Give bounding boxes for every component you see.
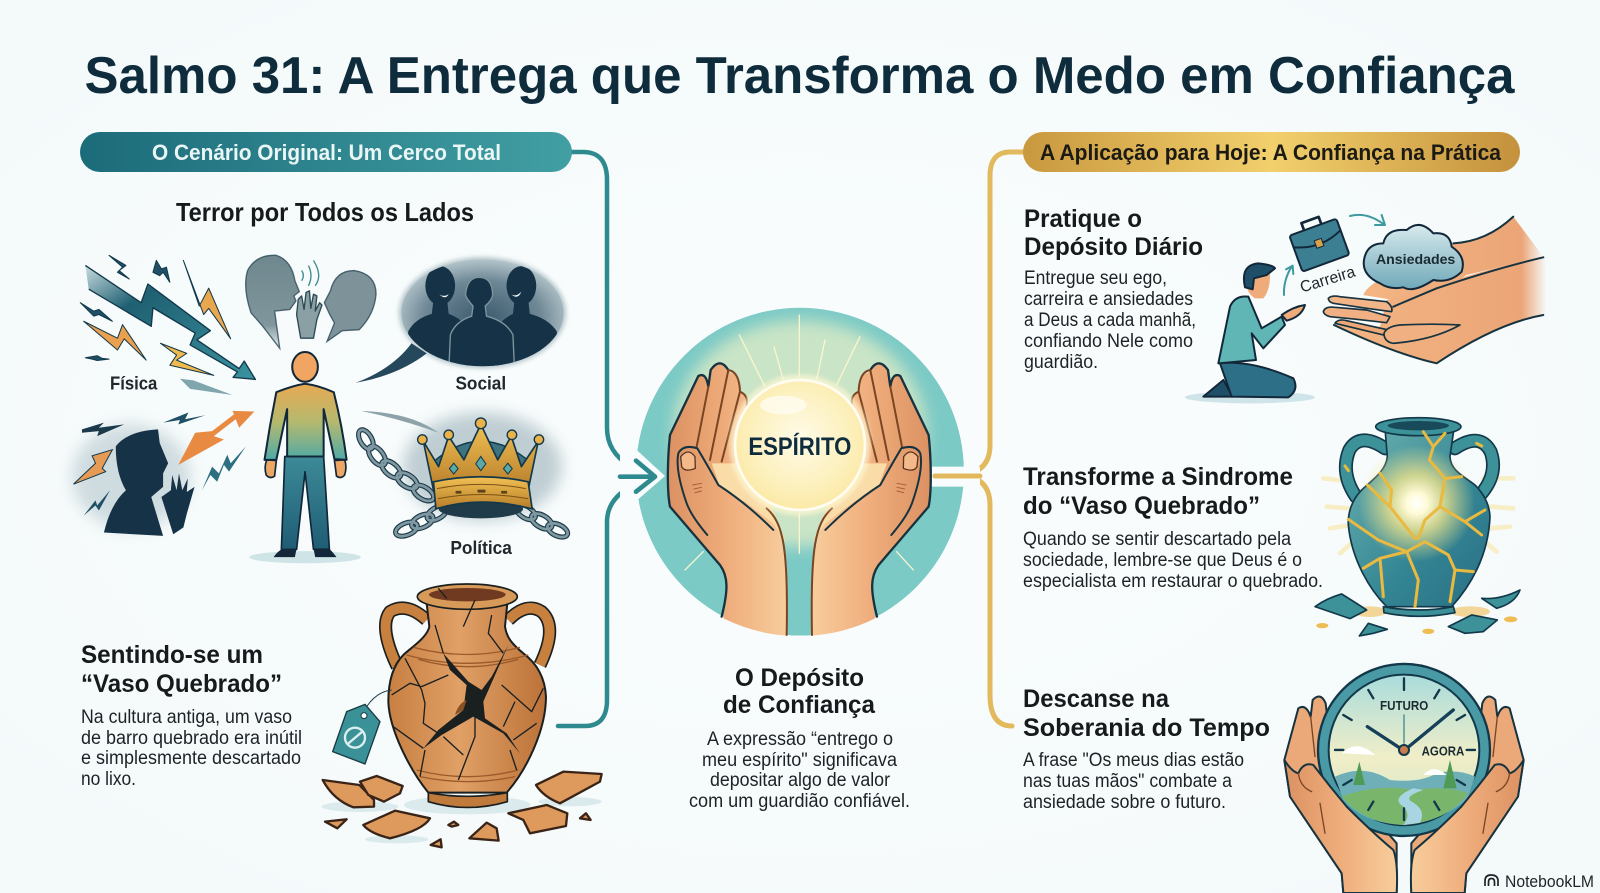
text block: transform the broken vase syndrome: Quando se sentir descartado pela — [1023, 529, 1291, 550]
text block: broken vase: Na cultura antiga, um vaso — [81, 707, 292, 728]
text block: broken vase: Sentindo-se um — [81, 641, 263, 669]
tag: discarded — [333, 690, 392, 764]
illustration: person handing over burdens — [1185, 211, 1547, 403]
label: social: Social — [455, 373, 506, 394]
text block: daily deposit: Depósito Diário — [1024, 233, 1203, 261]
text block: deposit of trust: O Depósito — [735, 664, 864, 692]
light rays — [685, 315, 913, 570]
illustration: broken clay vase — [322, 584, 602, 847]
right connector lines — [934, 152, 1023, 726]
text block: transform the broken vase syndrome: sociedade, lembre-se que Deus é o — [1023, 550, 1302, 571]
label: política: Política — [450, 537, 513, 558]
text block: transform the broken vase syndrome: Transforme a Sindrome — [1023, 463, 1293, 491]
text block: daily deposit: carreira e ansiedades — [1024, 289, 1193, 310]
label: career: Carreira — [1298, 264, 1357, 296]
notches in circle — [620, 450, 980, 501]
text block: rest in sovereignty of time: A frase "Os meus dias estão — [1023, 750, 1244, 771]
text block: rest in sovereignty of time: Descanse na — [1023, 685, 1170, 713]
icon: broken teal shards — [1315, 590, 1520, 636]
icon: kneeling person — [1185, 263, 1315, 403]
central illustration: hands holding spirit — [620, 308, 980, 636]
text block: deposit of trust: A expressão “entrego o — [707, 729, 893, 750]
gold connector stub — [935, 468, 980, 483]
text block: daily deposit: a Deus a cada manhã, — [1024, 310, 1196, 331]
text block: rest in sovereignty of time: ansiedade sobre o futuro. — [1023, 792, 1226, 813]
icon: crown and chains — [356, 411, 570, 540]
clock label: future: FUTURO — [1380, 699, 1428, 713]
text block: rest in sovereignty of time: nas tuas mãos" combate a — [1023, 771, 1232, 792]
vase body — [388, 603, 546, 793]
circular background — [636, 308, 964, 636]
text block: daily deposit: Pratique o — [1024, 205, 1142, 233]
illustration: person surrounded by terror — [72, 255, 570, 563]
icon: giving hands — [1323, 217, 1547, 363]
floor shadows — [322, 796, 602, 843]
text block: deposit of trust: de Confiança — [723, 691, 876, 719]
panel header: original scenario — [80, 132, 572, 172]
panel header: original scenario: O Cenário Original: Um Cerco Total — [152, 140, 501, 165]
text block: broken vase: de barro quebrado era inútil — [81, 728, 302, 749]
text block: broken vase: e simplesmente descartado — [81, 748, 301, 769]
icon: social speech bubble — [356, 257, 566, 383]
text block: daily deposit: guardião. — [1024, 352, 1098, 373]
text block: transform the broken vase syndrome: especialista em restaurar o quebrado. — [1023, 571, 1323, 592]
glowing spirit orb — [729, 374, 871, 516]
text block: rest in sovereignty of time — [1023, 685, 1270, 813]
hands behind clock — [1284, 696, 1397, 893]
text block: transform the broken vase syndrome: do “Vaso Quebrado” — [1023, 492, 1260, 520]
vase cracks and hole — [423, 645, 520, 753]
clay shards — [323, 772, 602, 847]
illustration: golden repaired vase and clock — [1284, 418, 1524, 893]
hands in front of clock — [1284, 760, 1397, 893]
left hand — [668, 363, 787, 636]
icon: central person — [249, 352, 361, 563]
text block: broken vase — [81, 641, 302, 790]
text block: daily deposit — [1024, 205, 1203, 373]
icon: golden glow rays — [1323, 478, 1513, 553]
left connector lines — [558, 152, 652, 726]
panel header: application today — [1023, 132, 1520, 172]
label: anxieties: Ansiedades — [1376, 251, 1456, 267]
icon: physical lightning bolts — [80, 255, 255, 395]
text block: broken vase: no lixo. — [81, 769, 136, 790]
icon: shouting silhouette — [72, 411, 254, 536]
title: Salmo 31: A Entrega que Transforma o Medo em Confiança — [84, 47, 1516, 105]
label: física: Física — [110, 373, 158, 394]
text block: deposit of trust — [689, 664, 910, 812]
orb label: ESPÍRITO — [748, 433, 851, 461]
heading: terror: Terror por Todos os Lados — [176, 197, 474, 227]
text block: rest in sovereignty of time: Soberania do Tempo — [1023, 714, 1270, 742]
right hand — [812, 363, 931, 636]
text block: deposit of trust: depositar algo de valor — [710, 770, 891, 791]
vase foot — [428, 793, 507, 807]
text block: deposit of trust: com um guardião confiável. — [689, 791, 910, 812]
connector arrow — [620, 461, 655, 492]
vase decorative bands — [407, 647, 528, 782]
text block: daily deposit: confiando Nele como — [1024, 331, 1193, 352]
icon: kintsugi vase — [1345, 418, 1493, 616]
vase handles — [386, 608, 550, 667]
icon: arrows — [1284, 215, 1385, 295]
notebooklm badge: NotebookLM — [1505, 872, 1594, 891]
icon: whispering heads — [246, 255, 376, 348]
text block: deposit of trust: meu espírito" significava — [702, 750, 897, 771]
icon: briefcase — [1287, 211, 1349, 272]
text block: daily deposit: Entregue seu ego, — [1024, 268, 1167, 289]
panel header: application today: A Aplicação para Hoje: A Confiança na Prática — [1040, 140, 1502, 165]
clock label: now: AGORA — [1422, 744, 1464, 758]
icon: gold dust under vase — [1316, 606, 1517, 634]
icon: clock — [1318, 664, 1490, 836]
icon: anxiety cloud — [1364, 225, 1463, 289]
vase rim — [417, 584, 517, 609]
text block: transform the broken vase syndrome — [1023, 463, 1323, 592]
text block: broken vase: “Vaso Quebrado” — [81, 670, 282, 698]
